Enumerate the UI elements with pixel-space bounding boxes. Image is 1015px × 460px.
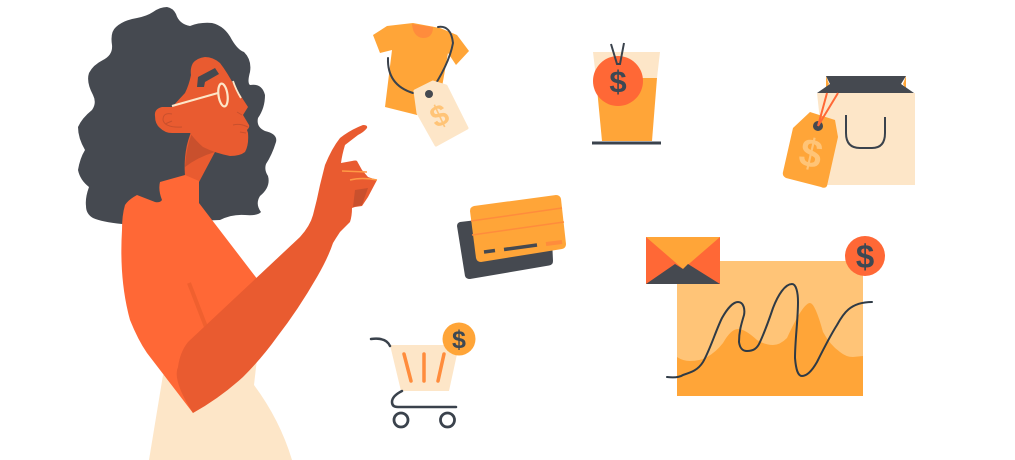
finger lines — [342, 171, 377, 180]
ear detail — [163, 114, 182, 127]
shopping bag with tag — [783, 76, 915, 188]
bag body — [817, 93, 915, 185]
tag string — [388, 27, 453, 94]
face — [155, 57, 249, 156]
t-shirt — [373, 23, 469, 115]
card stripes — [471, 208, 564, 235]
hair — [78, 7, 276, 224]
coin — [845, 236, 885, 276]
bag inner orange — [826, 76, 906, 89]
neck shadow — [185, 133, 215, 167]
back card — [457, 212, 553, 279]
front card — [470, 195, 566, 262]
chart background — [677, 261, 863, 396]
eyebrow — [197, 68, 219, 87]
lips detail — [233, 112, 248, 133]
glass base — [592, 142, 661, 144]
collar — [412, 24, 433, 38]
glass drink — [596, 78, 657, 141]
badge — [593, 56, 643, 106]
envelope flap — [646, 237, 720, 269]
skirt — [149, 350, 292, 460]
credit cards — [457, 195, 566, 279]
bag handle — [846, 115, 885, 148]
area chart — [677, 303, 863, 396]
woman figure — [78, 7, 377, 460]
shirt seam — [189, 283, 206, 327]
dollar sign: $ — [609, 64, 627, 99]
glass with price badge — [592, 43, 661, 143]
basket — [390, 345, 459, 391]
dollar sign: $ — [795, 130, 827, 178]
shopping cart — [371, 322, 476, 427]
dollar sign: $ — [856, 238, 874, 275]
cart handle and frame — [371, 339, 456, 407]
line chart — [667, 284, 872, 377]
neck — [185, 130, 216, 182]
t-shirt with price tag — [373, 23, 469, 145]
shirt — [121, 175, 258, 413]
dollar sign: $ — [452, 326, 466, 354]
envelope bottom — [646, 264, 720, 284]
card number dashes — [484, 245, 537, 252]
price tag — [415, 82, 467, 145]
coin — [442, 322, 476, 356]
bag top fold — [817, 76, 914, 93]
tag strings — [818, 93, 838, 126]
dollar sign: $ — [425, 98, 454, 135]
glass top — [593, 52, 660, 78]
wheels — [394, 413, 454, 427]
basket bars — [404, 354, 444, 381]
price tag — [783, 112, 838, 188]
badge string — [611, 43, 624, 64]
card chip dash — [546, 242, 562, 244]
arm and hand — [177, 125, 377, 413]
chart with envelope and coin — [646, 236, 885, 396]
tag hole — [813, 121, 823, 131]
glasses — [172, 81, 241, 107]
tag hole — [425, 90, 433, 98]
envelope — [646, 237, 720, 284]
hand shadow — [353, 188, 368, 207]
